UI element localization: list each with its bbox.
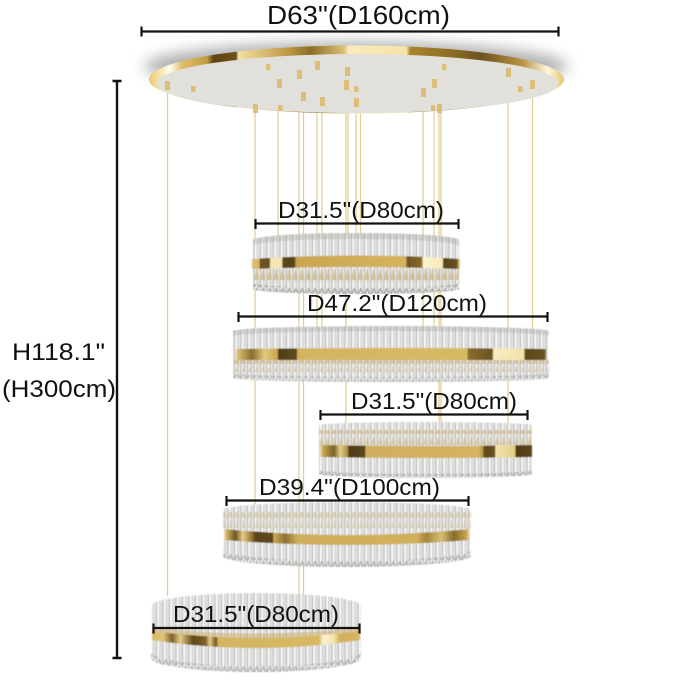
dimension: total height: (H300cm): [2, 376, 116, 403]
canopy shadow: [144, 42, 568, 90]
crystal tips: [253, 283, 459, 294]
gold rim: [149, 46, 564, 114]
crystal tips: [151, 652, 361, 672]
dimension: canopy width: [141, 0, 559, 36]
ring 3: right small tier: [319, 422, 532, 478]
crystal top shade: [253, 233, 459, 246]
dimension: ring 5 width: D31.5"(D80cm): [173, 601, 339, 627]
ring 1: top small tier: [252, 233, 460, 294]
dimension: ring 1 width: D31.5"(D80cm): [278, 197, 444, 223]
ring 5: bottom small tier: [151, 593, 361, 672]
gold band: [224, 529, 470, 545]
crystal tips: [223, 550, 471, 567]
crystal tips: [233, 373, 549, 382]
dimension: ring 1 width: [255, 197, 459, 229]
ceiling canopy: [144, 42, 568, 114]
suspension cables: [168, 70, 532, 600]
ring 4: lower medium tier: [223, 502, 471, 567]
dimension: ring 3 width: [320, 388, 528, 420]
gold band: [236, 348, 546, 360]
crystal warm lights: [152, 627, 360, 640]
dimension: ring 4 width: D39.4"(D100cm): [259, 474, 440, 500]
crystals: [223, 502, 471, 567]
crystals: [151, 593, 361, 672]
crystal tips: [319, 470, 532, 478]
crystals: [253, 233, 459, 294]
gold band: [252, 256, 460, 269]
canopy fittings: [165, 61, 535, 113]
dimension: total height: H118.1": [12, 339, 105, 366]
gold band: [152, 631, 360, 648]
canopy plate: [156, 54, 558, 113]
dimension: total height: [2, 81, 122, 658]
dimension: ring 2 width: [238, 290, 548, 322]
crystal warm lights: [223, 512, 471, 528]
dimension: canopy width: D63"(D160cm): [267, 0, 450, 30]
crystal warm lights: [253, 269, 459, 283]
crystals: [319, 422, 532, 478]
crystal warm lights: [233, 360, 549, 372]
dimension: ring 3 width: D31.5"(D80cm): [351, 388, 517, 414]
dimension: ring 5 width: [153, 601, 360, 634]
dimension: ring 2 width: D47.2"(D120cm): [307, 290, 487, 316]
ring 2: wide tier: [233, 326, 549, 382]
crystal warm lights: [319, 430, 532, 445]
crystal top shade: [233, 326, 549, 336]
dimension: ring 4 width: [226, 474, 469, 506]
crystals: [233, 326, 549, 382]
gold band: [320, 445, 532, 458]
